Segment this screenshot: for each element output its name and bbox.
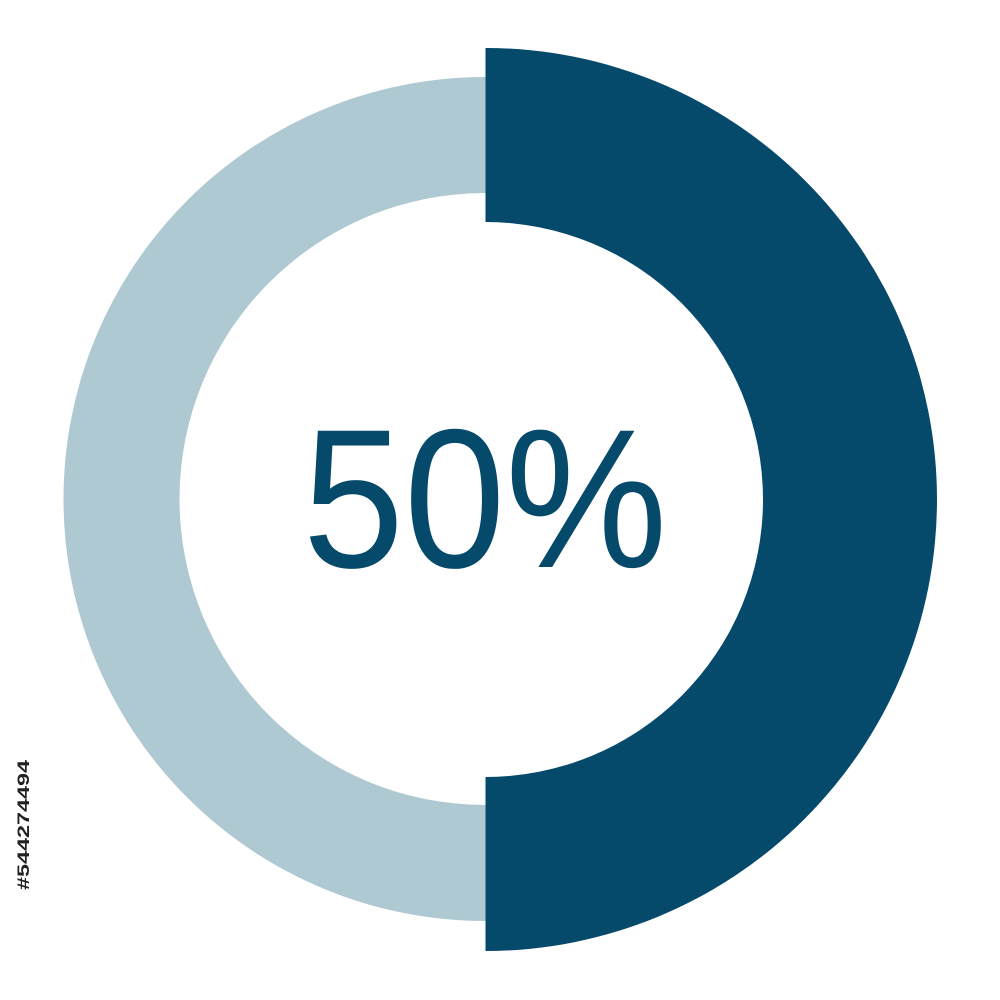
side stock id text: #544274494	[14, 759, 33, 890]
light remaining half ring	[64, 77, 486, 921]
center percentage label: 50%	[303, 389, 667, 610]
donut chart: 50%	[64, 48, 937, 951]
dark filled half ring	[486, 48, 937, 951]
